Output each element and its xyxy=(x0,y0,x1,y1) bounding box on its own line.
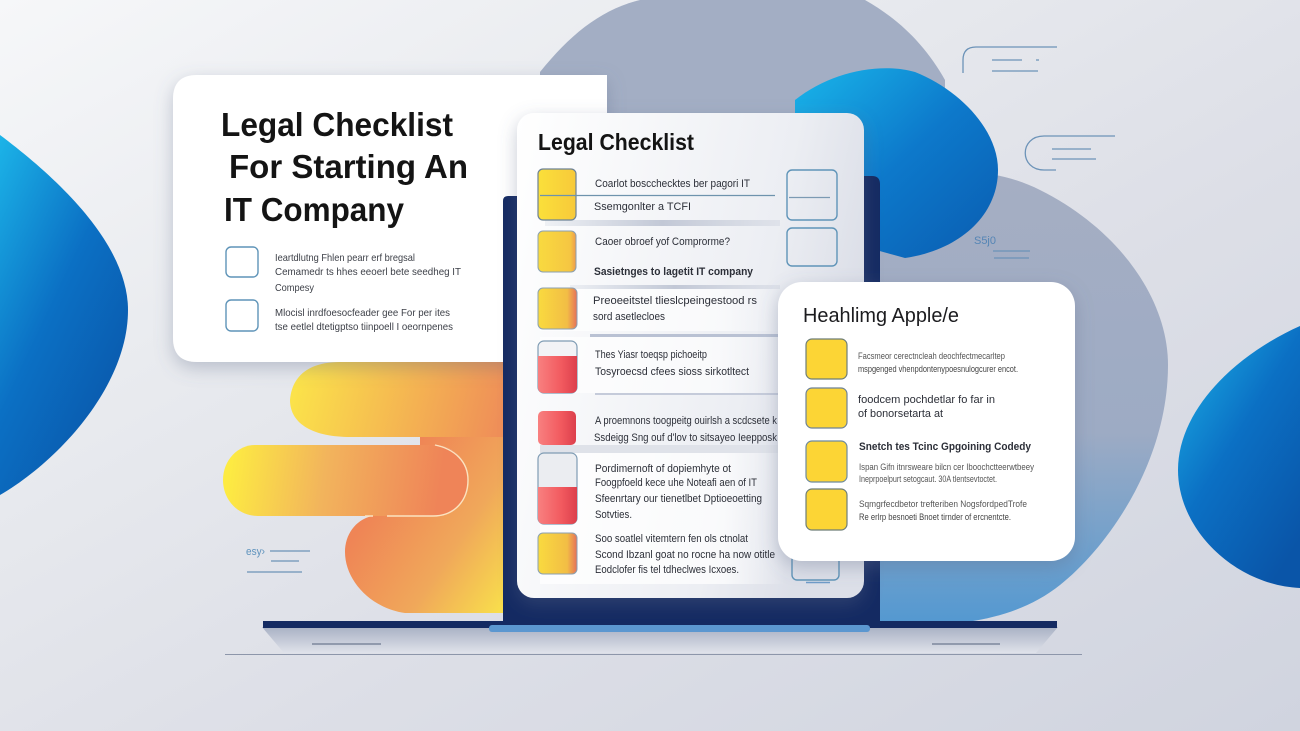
heading: Legal Checklist xyxy=(538,129,694,155)
row 7 xyxy=(538,533,775,576)
item 2: foodcem pochdetlar fo far in xyxy=(858,394,995,406)
blob: right blue xyxy=(1178,326,1300,588)
laptop base xyxy=(225,621,1082,654)
checkbox item 2: tse eetlel dtetigptso tiinpoell I oeornpenes xyxy=(275,321,453,333)
decoration: top right lines xyxy=(963,47,1057,73)
checkbox item 1 xyxy=(226,247,462,294)
item 3: Ispan Gifn itnrsweare bilcn cer Iboochctteerwtbeey xyxy=(859,462,1034,472)
item 3: Ineprpoelpurt setogcaut. 30A tlentsevtoctet. xyxy=(859,474,997,484)
row bands xyxy=(540,220,790,584)
row 3: sord asetlecloes xyxy=(593,311,665,323)
item 2 xyxy=(806,388,995,428)
row 1: Coarlot boscchecktes ber pagori IT xyxy=(595,178,750,190)
decoration: lower left label and lines: esy› xyxy=(246,546,265,558)
orange ribbon shape xyxy=(223,362,510,613)
decoration: middle right lines xyxy=(1025,136,1115,170)
blob: blue top xyxy=(795,68,998,258)
checkbox item 1: Ieartdlutng Fhlen pearr erf bregsal xyxy=(275,252,415,264)
row 7: Scond Ibzanl goat no rocne ha now otitle xyxy=(595,549,775,561)
checkbox item 2: Mlocisl inrdfoesocfeader gee For per ites xyxy=(275,307,450,319)
row 7: Soo soatlel vitemtern fen ols ctnolat xyxy=(595,533,748,545)
row 6: Pordimernoft of dopiemhyte ot xyxy=(595,463,731,475)
checkbox item 2 xyxy=(226,300,453,333)
blob: grey top xyxy=(540,0,945,300)
item 1: Facsmeor cerectncleah deochfectmecarltep xyxy=(858,351,1005,361)
row 3 xyxy=(538,288,758,329)
blob: left blue xyxy=(0,135,128,495)
row 5 xyxy=(538,411,777,445)
item 4: Sqmgrfecdbetor trefteriben NogsfordpedTrofe xyxy=(859,499,1027,509)
item 4 xyxy=(806,489,1027,530)
row 6: Sotvties. xyxy=(595,509,632,521)
right checkbox 3 xyxy=(792,555,839,582)
panel: secondary card xyxy=(778,282,1075,561)
decoration: label and lines on grey blob: S5j0 xyxy=(974,235,996,247)
row 4: Thes Yiasr toeqsp pichoeitp xyxy=(595,349,707,361)
right checkbox 1 xyxy=(787,170,837,220)
panel: main checklist xyxy=(517,113,864,598)
item 3: Snetch tes Tcinc Gpgoining Codedy xyxy=(859,441,1032,453)
title: For Starting An xyxy=(229,148,468,185)
row 6: Foogpfoeld kece uhe Noteafi aen of IT xyxy=(595,477,757,489)
checkbox item 1: Compesy xyxy=(275,282,315,294)
item 4: Re erlrp besnoeti Bnoet tirnder of ercnentcte. xyxy=(859,512,1011,522)
decoration: lower left label and lines xyxy=(246,546,310,572)
item 3 xyxy=(806,441,1034,484)
row 3: Preoeeitstel tlieslcpeingestood rs xyxy=(593,295,758,307)
row 2: Sasietnges to lagetit IT company xyxy=(594,266,754,278)
title xyxy=(221,106,468,228)
card heading: Heahlimg Apple/e xyxy=(803,305,959,327)
row 7: Eodclofer fis tel tdheclwes Icxoes. xyxy=(595,564,739,576)
item 2: of bonorsetarta at xyxy=(858,408,943,420)
right checkbox 2 xyxy=(787,228,837,266)
blob: grey large xyxy=(880,172,1168,625)
title: Legal Checklist xyxy=(221,106,453,143)
item 1 xyxy=(806,339,1018,379)
title: IT Company xyxy=(224,191,405,228)
row 5: A proemnons toogpeitg ouirlsh a scdcsete k xyxy=(595,415,777,427)
row 1 xyxy=(538,169,775,220)
row 1: Ssemgonlter a TCFI xyxy=(594,201,691,213)
item 1: mspgenged vhenpdontenypoesnulogcurer encot. xyxy=(858,364,1018,374)
row 4 xyxy=(538,341,749,393)
row 6 xyxy=(538,453,762,524)
row 2 xyxy=(538,231,754,278)
decoration: label and lines on grey blob xyxy=(974,235,1030,258)
checkbox item 1: Cemamedr ts hhes eeoerl bete seedheg IT xyxy=(275,266,462,278)
laptop xyxy=(225,176,1082,654)
row 6: Sfeenrtary our tienetlbet Dptioeoetting xyxy=(595,493,762,505)
row 4: Tosyroecsd cfees sioss sirkotltect xyxy=(595,366,749,378)
row 5: Ssdeigg Sng ouf d'lov to sitsayeo Ieepposk xyxy=(594,432,777,444)
laptop screen frame xyxy=(503,176,880,624)
row 2: Caoer obroef yof Comprorme? xyxy=(595,236,730,248)
card: title panel xyxy=(173,75,607,362)
